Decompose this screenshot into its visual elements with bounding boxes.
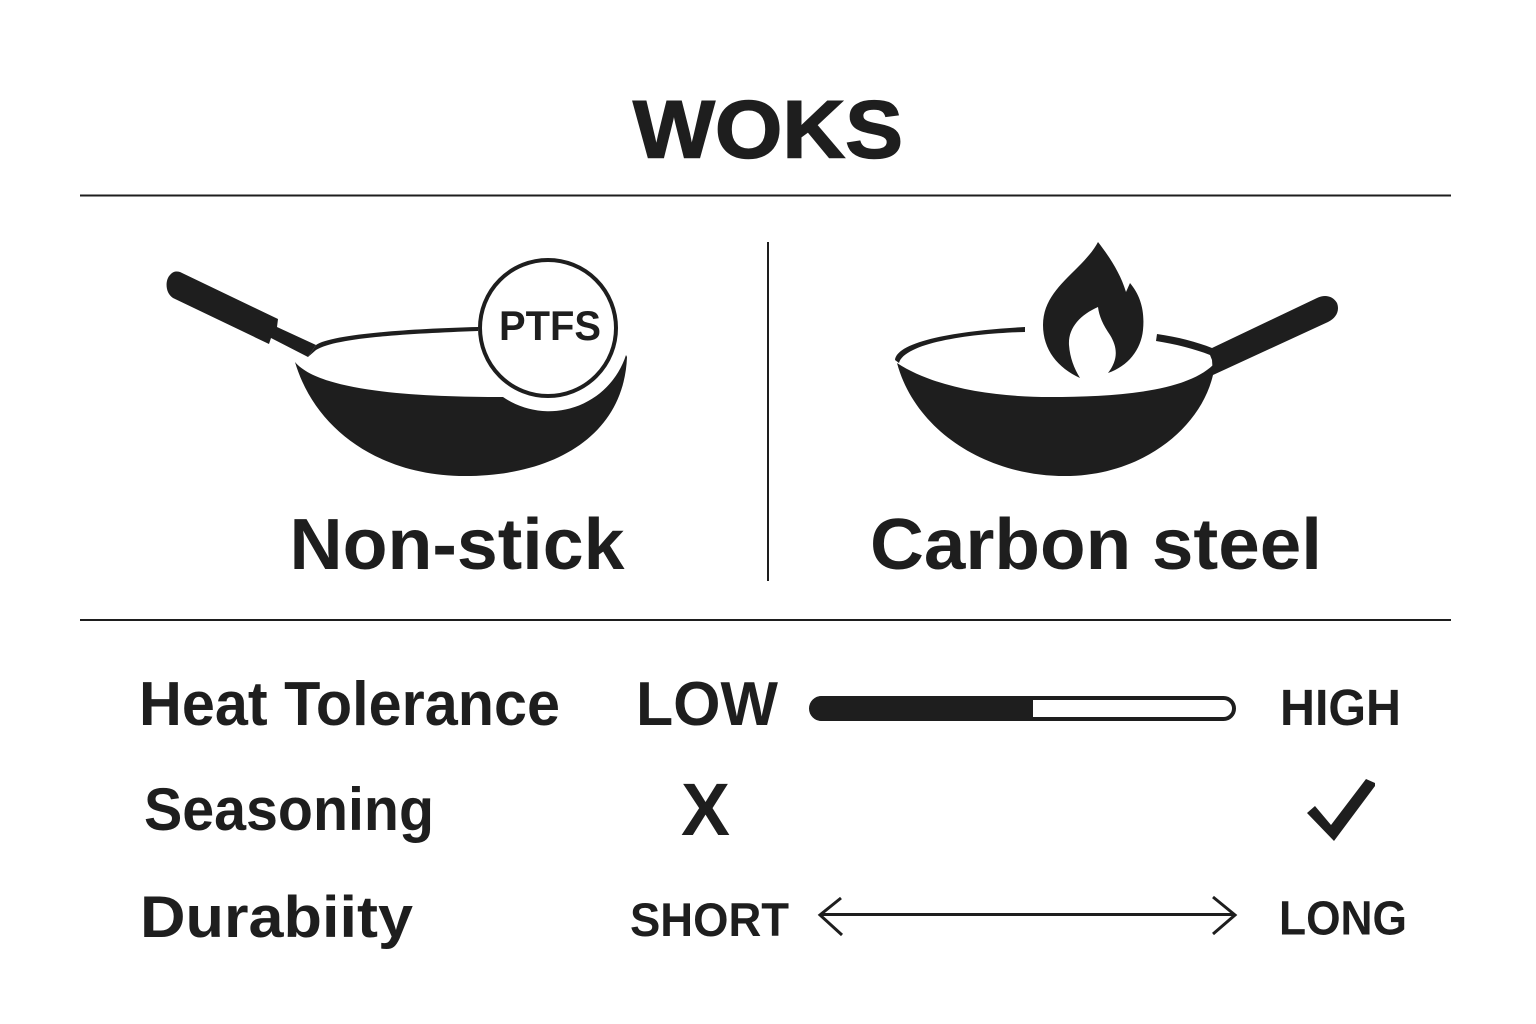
label: carbon steel: Carbon steel	[870, 505, 1322, 585]
row: seasoning	[144, 768, 1375, 851]
icon: cross: X	[681, 768, 730, 851]
icon: non-stick wok	[167, 260, 627, 476]
low label: LOW	[636, 670, 778, 739]
panel: non-stick wok	[167, 260, 627, 585]
short label: SHORT	[630, 893, 789, 946]
row label: heat tolerance: Heat Tolerance	[139, 670, 560, 739]
panel: carbon steel wok	[870, 242, 1338, 585]
icon: check mark	[1307, 779, 1375, 841]
icon: carbon steel wok	[895, 242, 1338, 476]
row label: seasoning: Seasoning	[144, 776, 434, 843]
arrow: double-headed	[820, 897, 1235, 935]
row: durability	[140, 885, 1407, 950]
heat bar	[810, 696, 1234, 721]
icon: non-stick wok: PTFS	[499, 302, 601, 349]
high label: HIGH	[1280, 679, 1401, 736]
label: non-stick: Non-stick	[290, 505, 625, 585]
long label: LONG	[1279, 892, 1407, 946]
title: WOKS	[633, 84, 903, 176]
row label: durability: Durabiity	[140, 885, 413, 950]
row: heat tolerance	[139, 670, 1401, 739]
